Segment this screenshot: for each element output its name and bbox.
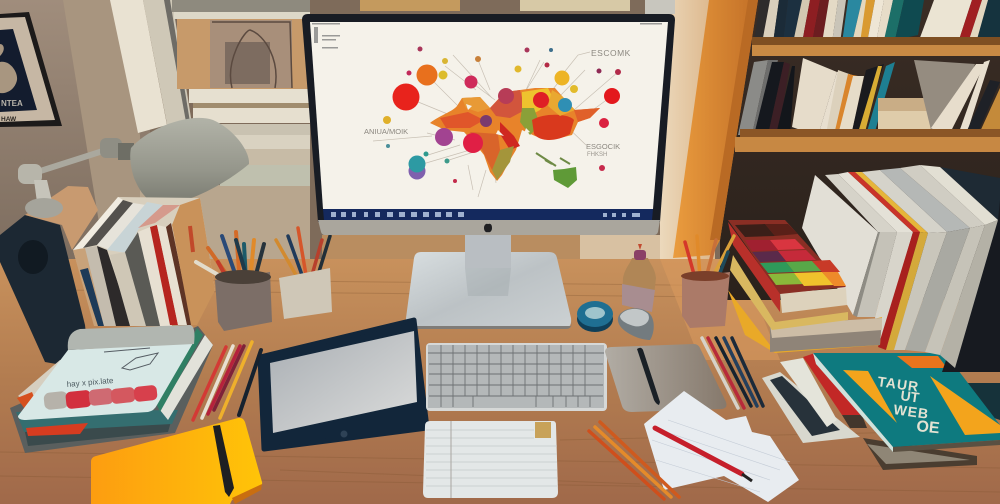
green book cover	[813, 353, 1000, 452]
warm light on desk	[660, 259, 780, 360]
orange pencils	[589, 422, 679, 499]
pencil cup right	[681, 236, 734, 328]
large upright book stack	[802, 165, 1000, 372]
desk books left	[73, 197, 215, 326]
ink jar	[577, 301, 613, 332]
map label right: ESGOCIK	[586, 142, 620, 151]
connector lines	[373, 52, 618, 197]
speaker	[0, 186, 98, 370]
monitor	[302, 14, 675, 222]
shelf two	[735, 129, 1000, 152]
map label right: FHKSH	[587, 152, 607, 158]
notebook sketch	[104, 348, 158, 370]
glue bottle	[622, 244, 656, 312]
desk grain	[0, 280, 1000, 492]
wood desk surface	[0, 259, 1000, 504]
keyboard	[426, 343, 607, 411]
palette color grid	[735, 224, 846, 286]
map labels: ESCOMK	[591, 48, 631, 58]
right stacked books	[762, 353, 1000, 470]
shelf one	[752, 37, 1000, 56]
map label left: ANIUA/MOIK	[364, 127, 408, 136]
green book cover: OE	[916, 418, 941, 437]
notebook handwriting: hay x pix.late	[66, 376, 114, 389]
swatches on notebook	[43, 385, 158, 410]
pencil cup left	[196, 232, 272, 331]
tablet	[260, 320, 427, 449]
world map	[430, 88, 600, 188]
desk lamp	[18, 118, 249, 218]
framed poster	[0, 12, 62, 127]
notebook stack	[10, 325, 213, 453]
color palette book stack	[728, 220, 882, 353]
silver tablet pad with pen	[605, 344, 726, 412]
pencils beside tablet	[193, 342, 261, 420]
writing pad	[423, 421, 558, 498]
bookshelf	[673, 0, 1000, 300]
computer mouse	[618, 308, 654, 340]
monitor screen	[310, 22, 668, 220]
green book cover: UT	[900, 387, 921, 406]
green book cover: TAUR	[877, 373, 920, 395]
square pencil holder	[276, 228, 332, 319]
map label right	[586, 142, 620, 158]
top row of books	[754, 0, 1000, 43]
loose paper sheets	[644, 391, 799, 502]
poster caption: HAW	[1, 116, 17, 123]
green book cover: WEB	[893, 401, 930, 422]
monitor stand	[406, 235, 572, 329]
window ui text	[312, 23, 662, 48]
orange notepad and pen	[91, 418, 262, 504]
monitor chin with logo	[318, 220, 660, 235]
window	[110, 0, 675, 186]
pencils right	[702, 338, 763, 408]
data bubbles	[383, 46, 621, 183]
poster text: NTEA	[1, 99, 23, 108]
middle row of books	[738, 58, 1000, 137]
